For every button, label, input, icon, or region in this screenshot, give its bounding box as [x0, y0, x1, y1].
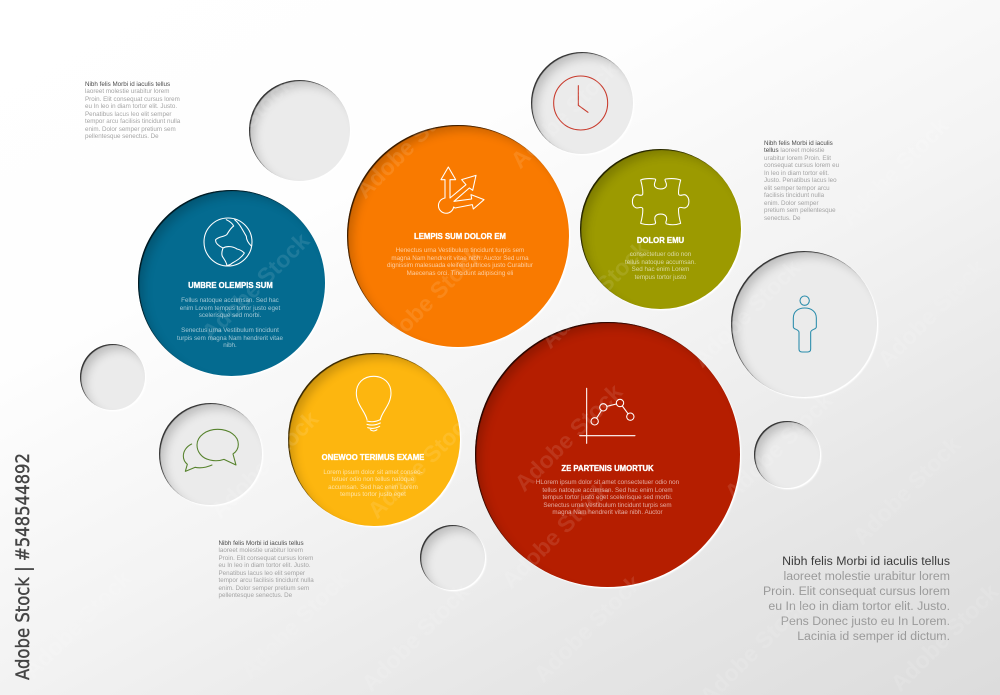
body text: scelerisque sed morbi. [199, 312, 261, 319]
text block: bottom left note: Proin. Elit consequat cursus lorem [218, 555, 313, 562]
heading: ZE PARTENIS UMORTUK [561, 463, 654, 473]
text block: top left note: eu In leo in diam tortor elit. Justo. [85, 103, 177, 110]
text block: top right note: senectus. De [764, 215, 800, 222]
watermark pattern: Adobe Stock [18, 565, 136, 683]
icon: clock [553, 76, 608, 130]
body text [177, 297, 283, 349]
text block: top left note: enim. Dolor semper pretium sem [85, 126, 176, 133]
text block: top right note: In leo in diam tortor elit. [764, 170, 829, 177]
icon: globe [203, 218, 252, 266]
text block: top left note: pellentesque senectus. De [85, 133, 159, 140]
body text: tellus natoque accumsan. Sed hac enim Lorem [542, 486, 673, 494]
body text: nibh. [223, 342, 237, 349]
body text: Maecenas orci. Tincidunt adipiscing eli [407, 270, 513, 276]
text block: top right note: urabitur lorem Proin. Elit [764, 155, 831, 162]
empty circle: small left [80, 344, 145, 410]
text block: bottom right note: Pens Donec justo eu In Lorem. [781, 614, 950, 628]
text block: bottom right note: Nibh felis Morbi id iaculis tellus [782, 554, 950, 568]
body text: tellus natoque accumsan. [625, 258, 696, 266]
text block: bottom right note: eu In leo in diam tortor elit. Justo. [768, 599, 950, 613]
empty circle: bottom centre [420, 525, 485, 590]
text block: bottom left note [218, 540, 314, 599]
body text [536, 479, 679, 516]
watermark pattern: Adobe Stock [535, 235, 653, 353]
body text: enim Lorem tempus tortor justo eget [180, 304, 280, 312]
text block: bottom left note: pellentesque senectus. De [218, 592, 292, 599]
body text: turpis sem magna Nam hendrerit vitae [177, 334, 283, 342]
text block: bottom right note: Proin. Elit consequat cursus lorem [763, 584, 950, 598]
body text: magna Nam hendrerit vitae nibh. Auctor Sed urna [391, 254, 529, 262]
text block: bottom right note [763, 554, 950, 643]
watermark pattern: Adobe Stock [528, 569, 646, 687]
heading: LEMPIS SUM DOLOR EM [414, 231, 506, 241]
body text: magna Nam hendrerit vitae nibh. Auctor [552, 509, 663, 516]
watermark pattern: Adobe Stock [872, 254, 990, 372]
text block: top right note: consequat cursus lorem eu [764, 162, 839, 169]
body text: accumsan. Sed hac enim Lorem [328, 484, 418, 490]
text block: top right note: elit semper tempor arcu [764, 185, 830, 192]
body text: Senectus urna Vestibulum tincidunt [181, 327, 279, 334]
watermark pattern: Adobe Stock [5, 255, 123, 373]
text block: bottom right note: Lacinia id semper id dictum. [797, 629, 950, 643]
panel: olive circle [580, 149, 741, 309]
watermark pattern: Adobe Stock [835, 112, 953, 230]
heading: ONEWOO TERIMUS EXAME [322, 452, 424, 462]
watermark pattern: Adobe Stock [43, 77, 161, 195]
watermark pattern: Adobe Stock [356, 578, 474, 695]
text block: top right note: facilisis tincidunt nulla [764, 192, 824, 199]
text block: bottom left note: Nibh felis Morbi id iaculis tellus [218, 540, 304, 546]
panel: teal circle [138, 190, 324, 376]
text block: top right note: enim. Dolor semper [764, 200, 819, 207]
icon: person [792, 296, 817, 352]
text block: bottom left note: enim. Dolor semper pretium sem [218, 585, 309, 592]
watermark pattern: Adobe Stock [205, 405, 323, 523]
body text: Henectus urna Vestibulum tincidunt turpis sem [396, 247, 524, 254]
body text: Lorem ipsum dolor sit amet conseo- [323, 468, 423, 476]
icon: line chart [579, 388, 636, 444]
icon: speech bubbles [182, 428, 239, 472]
circle: person [731, 251, 877, 397]
text block: top left note: Nibh felis Morbi id iaculis tellus [85, 80, 170, 88]
text block: top right note [764, 140, 839, 222]
watermark pattern: Adobe Stock [350, 85, 468, 203]
body text: consectetuer odio non [630, 251, 691, 258]
text block: bottom left note: laoreet molestie urabitur lorem [218, 547, 303, 554]
text block: top right note: pretium sem pellentesque [764, 207, 836, 214]
watermark pattern: Adobe Stock [719, 387, 837, 505]
heading: UMBRE OLEMPIS SUM [188, 280, 272, 290]
icon: branching arrows [438, 166, 484, 214]
body text: Fellus natoque accumsan. Sed hac [181, 297, 279, 304]
panel: red circle [475, 322, 740, 587]
watermark pattern: Adobe Stock [687, 254, 805, 372]
panel: yellow circle [288, 353, 460, 526]
watermark pattern: Adobe Stock [496, 475, 614, 593]
icon: light bulb [356, 376, 392, 432]
panel: orange circle [347, 125, 569, 347]
body text: tempus tortor justo eget [340, 491, 406, 498]
text block: top left note: laoreet molestie urabitur lorem [85, 88, 169, 95]
body text [323, 468, 423, 498]
text block: bottom left note: eu In leo in diam tortor elit. Justo. [218, 562, 311, 569]
watermark pattern: Adobe Stock [369, 241, 487, 359]
text block: top right note: Justo. Penatibus lacus leo [764, 177, 837, 184]
icon: puzzle piece [632, 178, 690, 226]
watermark pattern: Adobe Stock [235, 565, 353, 683]
text block: bottom left note: Penatibus lacus leo elit semper [218, 570, 305, 577]
heading: DOLOR EMU [637, 235, 684, 245]
watermark pattern: Adobe Stock [505, 55, 623, 173]
body text: Sed hac enim Lorem [632, 266, 689, 273]
text block: top left note [85, 80, 180, 140]
body text: tempus tortor justo eget scelerisque sed morbi. [543, 494, 672, 501]
watermark pattern: Adobe Stock [180, 70, 298, 188]
body text [625, 251, 696, 280]
text block: top left note: Penatibus lacus leo elit semper [85, 111, 172, 118]
body text: Senectus urna Vestibulum tincidunt turpis sem [543, 502, 672, 508]
text block: bottom left note: tempor arcu facilisis tincidunt nulla [218, 577, 314, 584]
body text: tetuer odio non tellus natoque [332, 476, 414, 483]
text block: top left note: Proin. Elit consequat cursus lorem [85, 96, 180, 103]
circle: speech bubbles [158, 403, 262, 505]
watermark pattern: Adobe Stock [50, 391, 168, 509]
watermark pattern: Adobe Stock [509, 378, 627, 496]
watermark pattern: Adobe Stock [713, 63, 831, 181]
empty circle: small right [754, 421, 820, 488]
text block: top right note: tellus laoreet molestie [764, 147, 824, 154]
body text [387, 247, 533, 276]
watermark pattern: Adobe Stock [847, 431, 965, 549]
body text: HLorem ipsum dolor sit amet consectetuer odio non [536, 479, 679, 486]
body text: dignissim malesuada eleifend ultrices justo Curabitur [387, 262, 533, 269]
body text: tempus tortor justo [635, 274, 686, 280]
empty circle: top left [249, 80, 350, 181]
text block: top right note: Nibh felis Morbi id iaculis [764, 140, 833, 146]
watermark pattern: Adobe Stock [196, 227, 314, 345]
circle: clock [531, 52, 633, 154]
text block: top left note: tempor arcu facilisis tincidunt nulla [85, 118, 180, 125]
text block: bottom right note: laoreet molestie urabitur lorem [783, 569, 950, 583]
watermark pattern: Adobe Stock [362, 405, 480, 523]
